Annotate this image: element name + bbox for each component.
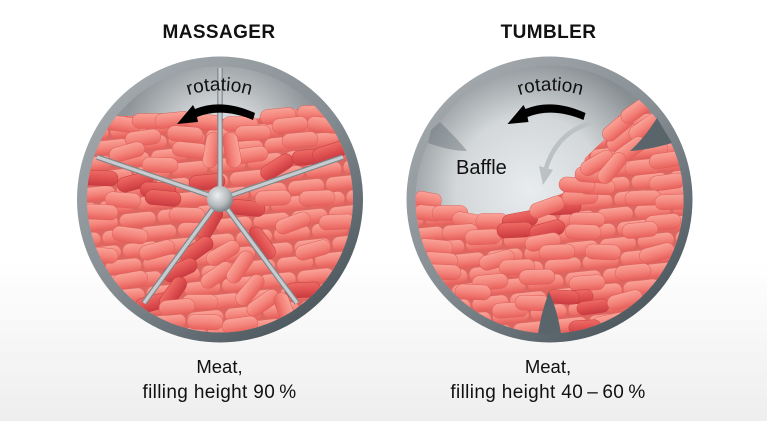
baffle: upper left	[428, 122, 467, 151]
rotor hub	[207, 186, 233, 212]
caption: tumbler	[450, 356, 646, 403]
caption: massager: filling height 90 %	[142, 382, 297, 403]
caption: massager	[142, 356, 297, 403]
caption: tumbler: filling height 40 – 60 %	[450, 382, 646, 403]
drum ring	[406, 56, 692, 342]
panel: massager drum	[77, 56, 363, 342]
label: baffle: Baffle	[456, 157, 507, 179]
meat fill	[87, 105, 353, 332]
title: massager: MASSAGER	[162, 22, 276, 43]
caption: tumbler: Meat,	[525, 356, 571, 377]
rotation arrow	[177, 104, 255, 124]
rotation label: rotation	[518, 77, 582, 95]
title: tumbler: TUMBLER	[501, 22, 596, 43]
rotor arms	[97, 68, 343, 303]
drum ring	[77, 56, 363, 342]
baffle: right	[630, 118, 672, 151]
drum interior	[416, 66, 684, 334]
panel: tumbler drum	[406, 56, 692, 342]
rotation label: rotation	[186, 77, 252, 95]
rotation arrow	[508, 104, 586, 124]
meat fill	[416, 100, 684, 333]
grey meat-flow arrow	[539, 122, 595, 185]
drum interior	[87, 66, 353, 332]
caption: massager: Meat,	[196, 356, 243, 377]
baffle: bottom	[538, 292, 561, 334]
